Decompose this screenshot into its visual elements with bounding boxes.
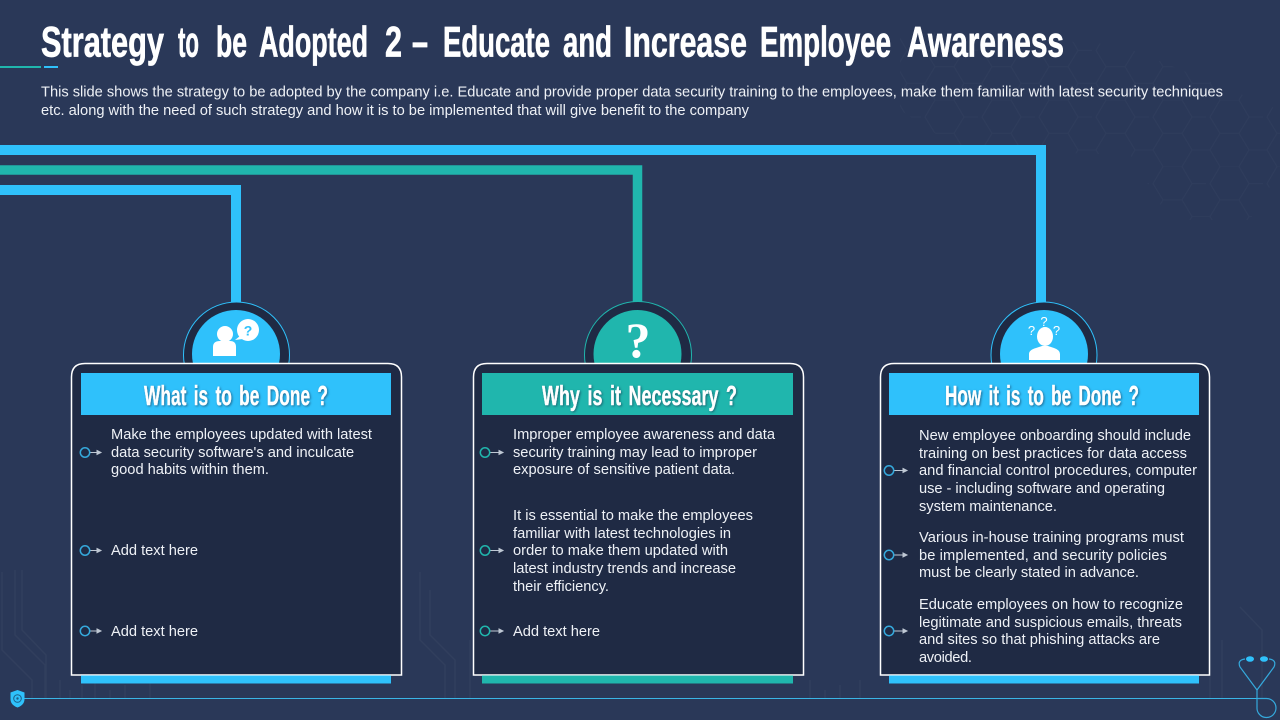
text: how items: Various in-house training programs must bbox=[919, 530, 1184, 546]
footer bar bbox=[889, 676, 1199, 684]
icon badge: how bbox=[991, 302, 1097, 408]
title: Strategy bbox=[41, 18, 164, 66]
title accent line bbox=[0, 66, 58, 68]
icon badge: how: ? bbox=[1053, 323, 1060, 338]
text: why items bbox=[513, 427, 776, 640]
text: how items: training on best practices for data access bbox=[919, 446, 1187, 462]
text: why items: Improper employee awareness and data bbox=[513, 427, 776, 443]
text: how items: New employee onboarding should include bbox=[919, 428, 1191, 444]
title: and bbox=[563, 18, 612, 66]
text: how items: be implemented, and security policies bbox=[919, 548, 1167, 564]
title bbox=[41, 18, 1064, 66]
heading: What is to be Done ? bbox=[144, 380, 328, 411]
title: – bbox=[412, 18, 428, 66]
title: Educate bbox=[443, 18, 550, 66]
text: how items: Educate employees on how to recognize bbox=[919, 597, 1183, 613]
text: why items: exposure of sensitive patient data. bbox=[513, 462, 735, 478]
header bar bbox=[482, 373, 793, 415]
icon badge: why bbox=[584, 302, 692, 408]
header bar bbox=[889, 373, 1199, 415]
text: what items: Make the employees updated with latest bbox=[111, 427, 372, 443]
title: to bbox=[178, 18, 199, 66]
panel background bbox=[474, 364, 804, 675]
description: This slide shows the strategy to be adopted by the company i.e. Educate and provide proper data security training to the employees, make them familiar with latest security techniques bbox=[41, 84, 1223, 100]
text: why items: It is essential to make the employees bbox=[513, 508, 753, 524]
title: Awareness bbox=[907, 18, 1064, 66]
icon badge: how: ? bbox=[1028, 323, 1035, 338]
text: how items: and sites so that phishing attacks are bbox=[919, 632, 1160, 648]
panel background bbox=[72, 364, 402, 675]
icon badge: what bbox=[184, 302, 290, 408]
panel: what is to be done bbox=[72, 364, 402, 684]
bullet markers bbox=[884, 466, 907, 636]
title: Increase bbox=[624, 18, 747, 66]
footer line bbox=[24, 698, 1258, 700]
connector: blue to what bbox=[0, 190, 236, 305]
connector: teal to why bbox=[0, 170, 638, 305]
bullet markers bbox=[480, 448, 503, 636]
text: how items: legitimate and suspicious emails, threats bbox=[919, 615, 1182, 631]
text: how items: use - including software and operating bbox=[919, 481, 1165, 497]
panel: why is it necessary bbox=[474, 364, 804, 684]
description bbox=[41, 84, 1223, 119]
panel: how it is to be done bbox=[880, 364, 1210, 684]
footer bar bbox=[482, 676, 793, 684]
text: why items: order to make them updated with bbox=[513, 543, 728, 559]
text: why items: latest industry trends and increase bbox=[513, 561, 736, 577]
icon badge: why: ? bbox=[626, 312, 650, 368]
title: Adopted bbox=[259, 18, 368, 66]
text: what items: Add text here bbox=[111, 543, 198, 559]
title: Employee bbox=[760, 18, 891, 66]
icon: stethoscope bbox=[1239, 656, 1276, 717]
title: 2 bbox=[385, 18, 402, 66]
text: how items: and financial control procedures, computer bbox=[919, 463, 1197, 479]
panel background bbox=[880, 364, 1210, 675]
description: etc. along with the need of such strategy and how it is to be implemented that will give benefit to the company bbox=[41, 103, 750, 119]
text: how items: system maintenance. bbox=[919, 499, 1057, 515]
connector: blue to how bbox=[0, 150, 1041, 305]
icon: shield bbox=[10, 690, 24, 708]
text: what items: Add text here bbox=[111, 624, 198, 640]
text: why items: their efficiency. bbox=[513, 579, 609, 595]
title: be bbox=[216, 18, 247, 66]
text: why items: familiar with latest technologies in bbox=[513, 526, 731, 542]
text: what items: data security software's and inculcate bbox=[111, 445, 354, 461]
heading: Why is it Necessary ? bbox=[542, 380, 737, 411]
text: why items: Add text here bbox=[513, 624, 600, 640]
text: how items bbox=[919, 428, 1197, 666]
text: how items: must be clearly stated in advance. bbox=[919, 565, 1139, 581]
heading: How it is to be Done ? bbox=[945, 380, 1139, 411]
text: how items: avoided. bbox=[919, 650, 972, 666]
text: why items: security training may lead to improper bbox=[513, 445, 757, 461]
icon badge: what: ? bbox=[244, 322, 252, 338]
header bar bbox=[81, 373, 391, 415]
text: what items: good habits within them. bbox=[111, 462, 269, 478]
bullet markers bbox=[80, 448, 101, 636]
footer bar bbox=[81, 676, 391, 684]
icon badge: how: ? bbox=[1040, 314, 1048, 329]
text: what items bbox=[111, 427, 372, 640]
